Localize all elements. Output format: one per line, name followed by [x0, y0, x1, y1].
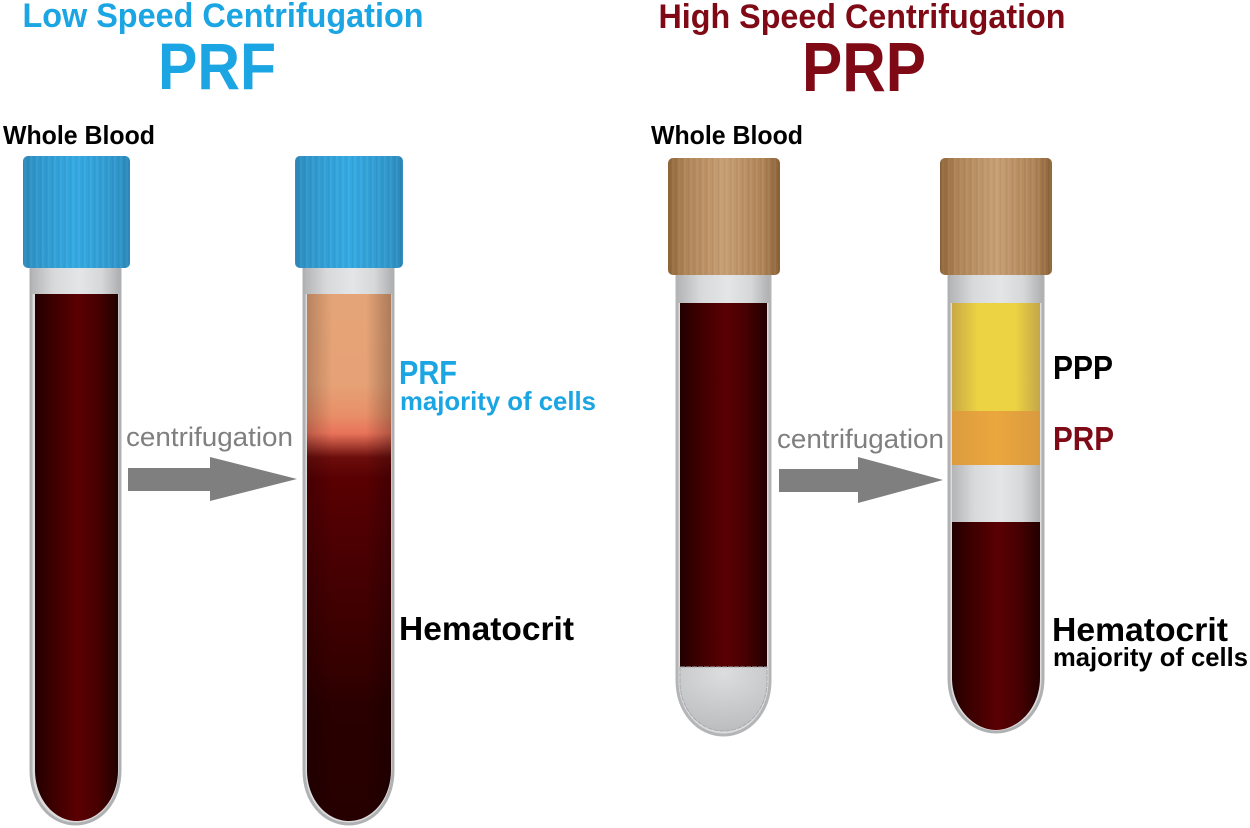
label: centrifugation right: centrifugation — [777, 424, 944, 454]
label: PRP: PRP — [1053, 420, 1114, 457]
label: PRF majority of cells — [399, 354, 596, 416]
label: whole blood left: Whole Blood — [3, 120, 155, 150]
tube: PRF whole blood — [23, 156, 130, 824]
tube: PRP separated — [940, 158, 1052, 732]
label: hematocrit majority of cells: Hematocrit — [1052, 611, 1228, 648]
label: hematocrit majority of cells: majority of cells — [1053, 642, 1248, 672]
empty rounded tube bottom — [680, 667, 767, 731]
label: PRF majority of cells: PRF — [399, 354, 457, 391]
arrow: left — [128, 457, 297, 501]
tube: PRF separated — [295, 156, 403, 824]
label: PRF majority of cells: majority of cells — [400, 386, 596, 416]
label: whole blood right: Whole Blood — [651, 120, 803, 150]
heading: PRF: PRF — [158, 29, 276, 103]
heading: PRP: PRP — [802, 28, 926, 106]
label: hematocrit left: Hematocrit — [399, 610, 574, 647]
label: PPP: PPP — [1053, 349, 1113, 386]
label: hematocrit majority of cells — [1052, 611, 1248, 672]
arrow: right — [779, 457, 943, 503]
tube: PRP whole blood — [668, 158, 780, 735]
label: centrifugation left: centrifugation — [126, 422, 293, 452]
